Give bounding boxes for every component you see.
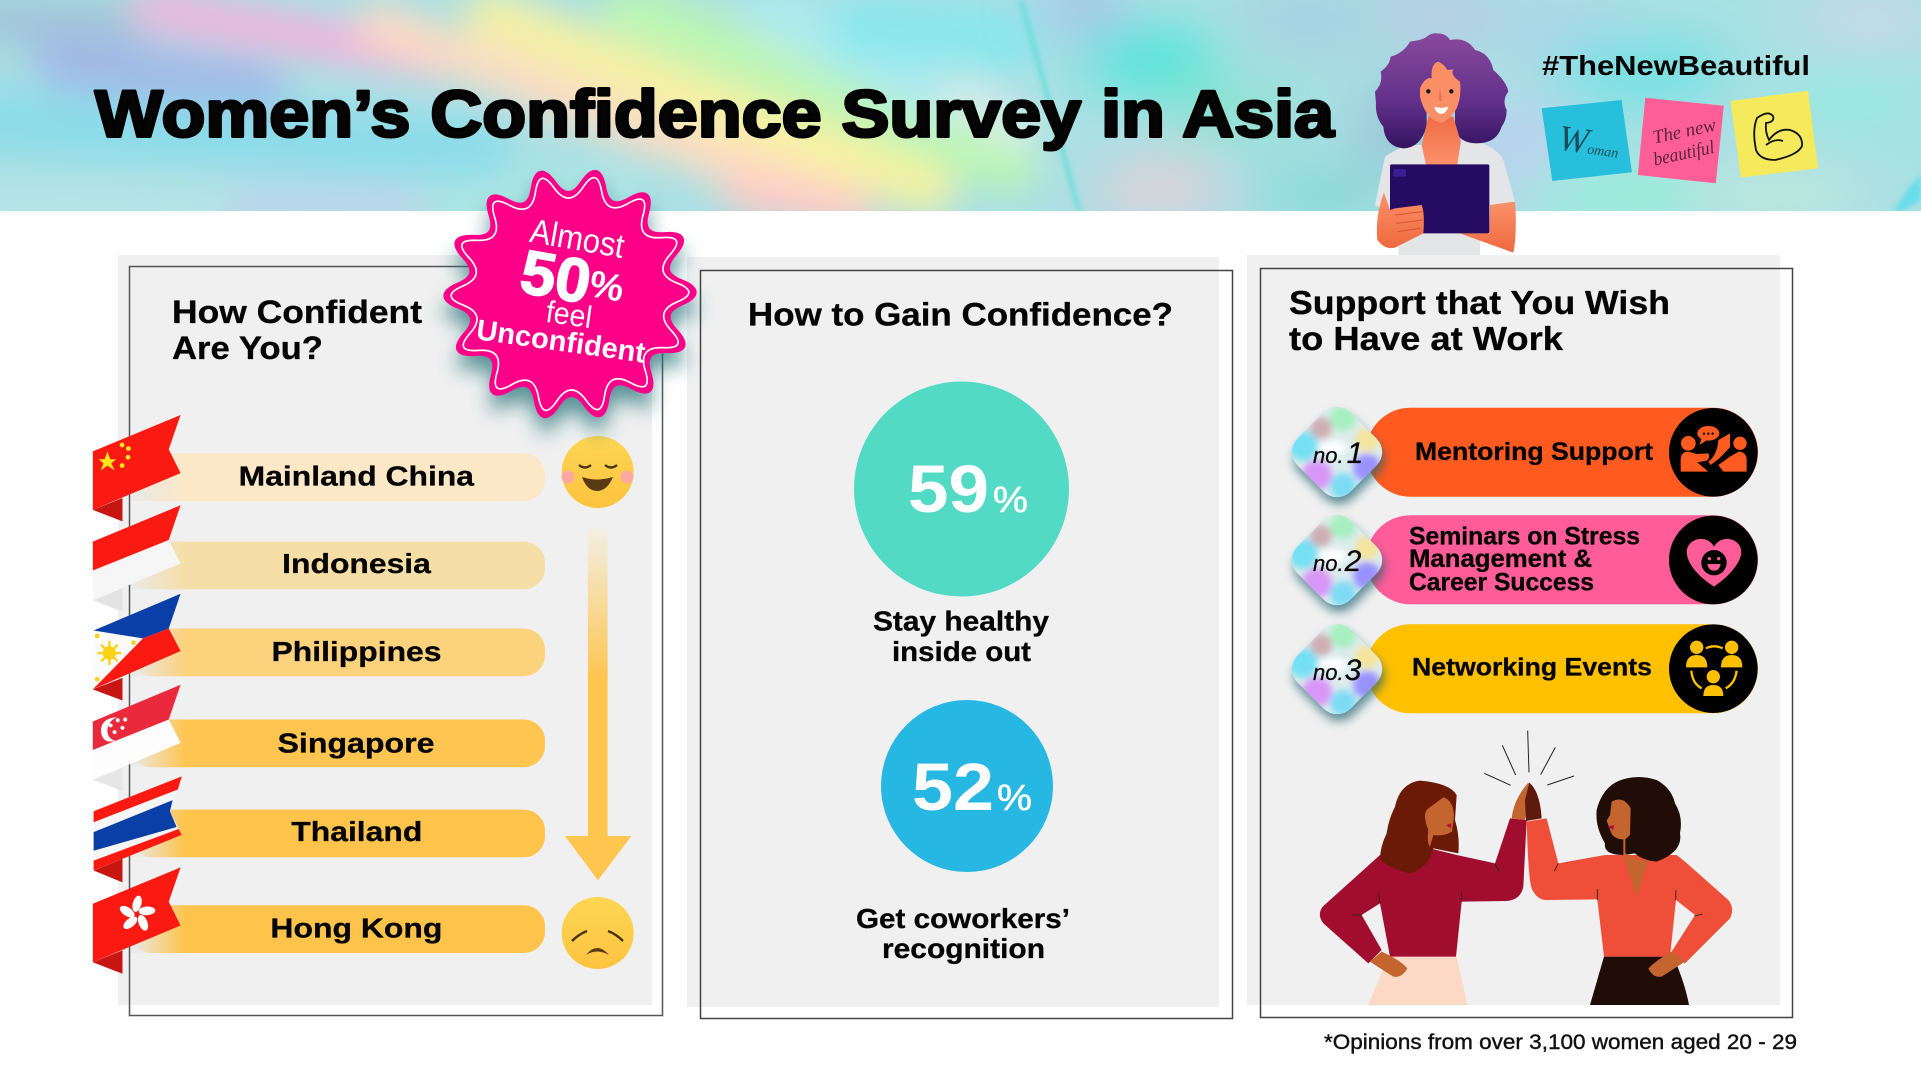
badge: no 2: no.2 bbox=[1313, 545, 1362, 578]
caption: coworkers recognition: Get coworkers’ bbox=[856, 903, 1070, 934]
burst callout: almost 50 percent: Almost bbox=[527, 212, 628, 266]
stat circle: 59 percent: 59 bbox=[908, 452, 989, 527]
header background bbox=[0, 0, 1921, 221]
ranking pill: mentoring support bbox=[1366, 408, 1758, 497]
burst callout: almost 50 percent: feel bbox=[544, 294, 594, 335]
country rows bbox=[131, 453, 545, 953]
caption: stay healthy: Stay healthy bbox=[873, 606, 1049, 636]
heading: how confident: Are You? bbox=[172, 330, 323, 366]
stat circle: 59 percent bbox=[854, 382, 1069, 596]
illustration: two women high five bbox=[1320, 731, 1732, 1005]
row pill: mainland china bbox=[131, 453, 545, 501]
sticky note: the new beautiful: beautiful bbox=[1651, 137, 1716, 170]
badge: no 1: no.1 bbox=[1313, 437, 1363, 470]
flag: hong kong bbox=[93, 867, 181, 974]
row pill: philippines: Philippines bbox=[272, 636, 442, 667]
ranking pill: seminars: Career Success bbox=[1409, 568, 1594, 596]
burst callout: almost 50 percent bbox=[444, 173, 696, 433]
ranking pill: seminars bbox=[1366, 515, 1758, 604]
illustration: woman with tablet bbox=[1375, 33, 1516, 255]
sticky note: woman: Woman bbox=[1556, 117, 1622, 166]
smiley: happy bbox=[562, 436, 634, 508]
row pill: indonesia bbox=[131, 542, 545, 589]
flag: thailand bbox=[94, 776, 182, 882]
burst callout: almost 50 percent: 50 bbox=[515, 237, 596, 318]
flag: indonesia bbox=[93, 505, 181, 612]
stat circle: 52 percent: 52 bbox=[912, 750, 994, 825]
row pill: indonesia: Indonesia bbox=[282, 548, 431, 579]
ranking pill: mentoring support: Mentoring Support bbox=[1415, 438, 1654, 466]
stat circle: 59 percent: % bbox=[993, 479, 1028, 520]
panel: how confident bbox=[118, 255, 662, 1016]
sticky note: muscle bbox=[1730, 91, 1818, 178]
sticky note: the new beautiful: The new bbox=[1651, 115, 1718, 149]
icon: heart smile bbox=[1669, 516, 1758, 604]
ranking pill: seminars: Seminars on Stress bbox=[1409, 522, 1640, 550]
sticky note: the new beautiful bbox=[1638, 98, 1724, 183]
row pill: hong kong bbox=[131, 905, 545, 953]
stat circle: 52 percent: % bbox=[997, 777, 1032, 818]
arrow: gradient down bbox=[565, 528, 631, 880]
sticky note: woman bbox=[1542, 100, 1632, 181]
flag: singapore bbox=[93, 685, 181, 791]
ranking pill: networking events bbox=[1366, 624, 1758, 713]
burst callout: almost 50 percent: % bbox=[586, 263, 627, 311]
panel: how to gain confidence bbox=[687, 257, 1232, 1018]
hashtag: #TheNewBeautiful bbox=[1542, 50, 1810, 81]
row pill: thailand: Thailand bbox=[291, 816, 422, 847]
burst callout: almost 50 percent: Unconfident bbox=[474, 314, 648, 370]
heading: how to gain: How to Gain Confidence? bbox=[748, 296, 1173, 332]
heading: support: to Have at Work bbox=[1289, 320, 1564, 357]
badge: no 1 bbox=[1286, 402, 1392, 512]
flag: china bbox=[93, 415, 181, 521]
row pill: singapore bbox=[131, 720, 545, 767]
ranking pill: seminars: Management & bbox=[1409, 545, 1592, 573]
stat circle: 52 percent bbox=[881, 700, 1053, 872]
caption: stay healthy: inside out bbox=[892, 636, 1031, 667]
badge: no 3: no.3 bbox=[1313, 654, 1362, 687]
ranking pill: networking events: Networking Events bbox=[1412, 654, 1652, 682]
smiley: sad bbox=[562, 897, 634, 969]
icon: mentoring bbox=[1669, 408, 1758, 497]
badge: no 3 bbox=[1286, 619, 1392, 729]
title: Women’s Confidence Survey in Asia bbox=[95, 76, 1335, 150]
row pill: mainland china: Mainland China bbox=[239, 460, 474, 491]
footnote: *Opinions from over 3,100 women aged 20 - 29 bbox=[1324, 1031, 1797, 1054]
flag: philippines bbox=[93, 594, 181, 700]
heading: support: Support that You Wish bbox=[1289, 284, 1670, 321]
panel: support at work bbox=[1247, 255, 1792, 1018]
row pill: singapore: Singapore bbox=[278, 728, 434, 759]
row pill: philippines bbox=[131, 628, 545, 676]
row pill: hong kong: Hong Kong bbox=[270, 913, 442, 944]
heading: how confident: How Confident bbox=[172, 294, 422, 330]
row pill: thailand bbox=[131, 810, 545, 857]
icon: network people bbox=[1669, 624, 1758, 713]
badge: no 2 bbox=[1286, 510, 1392, 620]
caption: coworkers recognition: recognition bbox=[882, 933, 1045, 964]
